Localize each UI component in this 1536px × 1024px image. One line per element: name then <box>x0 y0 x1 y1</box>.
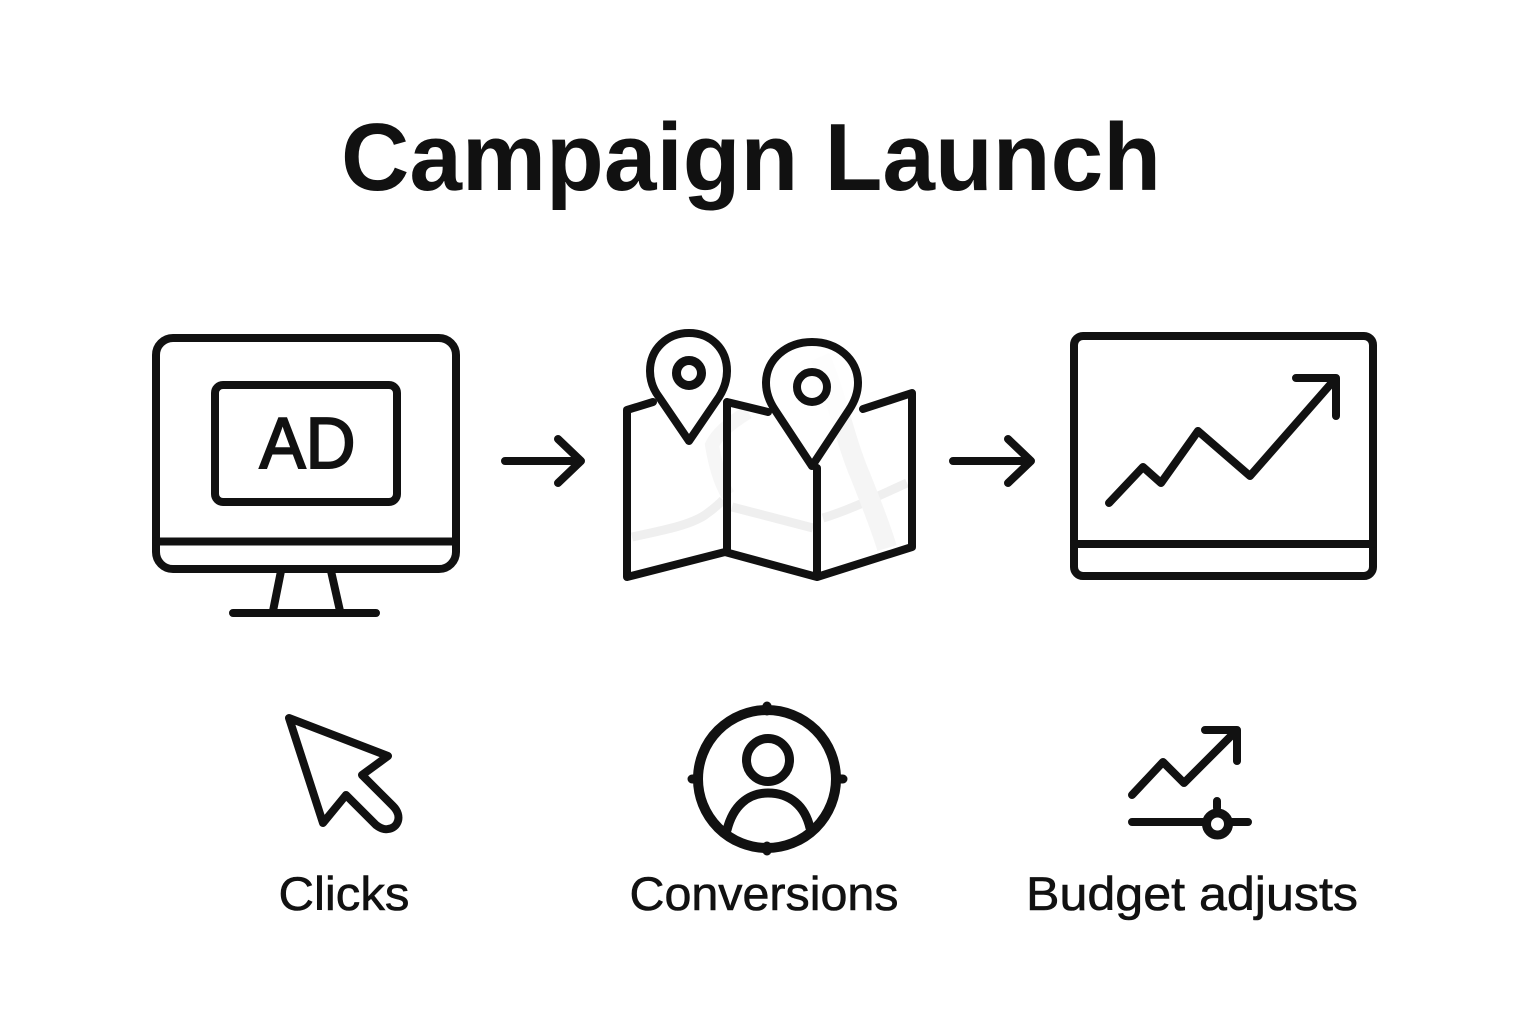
arrow: monitor to map <box>505 439 581 483</box>
faint map roads <box>632 357 907 548</box>
label: budget adjusts: Budget adjusts <box>1026 867 1358 920</box>
icon: folded map with pins <box>627 333 912 577</box>
arrow: map to chart <box>953 439 1031 483</box>
map outline <box>627 393 912 577</box>
pin: left <box>650 333 727 441</box>
pin: right <box>766 342 858 466</box>
icon: target person <box>692 706 843 851</box>
label: clicks: Clicks <box>278 867 410 920</box>
icon: computer monitor with ad <box>156 338 456 613</box>
title: Campaign Launch <box>341 104 1161 211</box>
icon: budget trend slider <box>1132 730 1248 835</box>
ad label: AD <box>260 404 356 484</box>
icon: cursor <box>289 718 398 829</box>
icon: chart on screen <box>1074 336 1373 576</box>
label: conversions: Conversions <box>630 867 898 920</box>
